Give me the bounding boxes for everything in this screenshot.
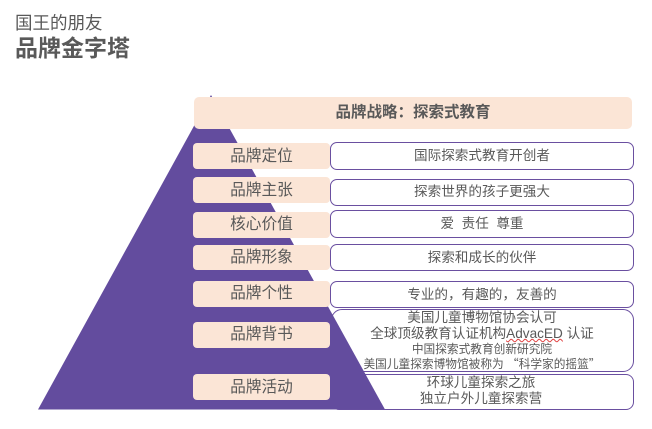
top bar: brand strategy [194,97,632,129]
label: proposition [193,177,330,203]
text: endorsement lines [363,310,600,372]
label: activities [193,374,330,400]
text: endorsement lines: 全球顶级教育认证机构AdvacED 认证 [370,326,594,341]
top bar: brand strategy: 品牌战略：探索式教育 [335,104,490,121]
box: activities [331,374,634,410]
label: endorsement: 品牌背书 [230,326,293,343]
box: personality: 专业的，有趣的，友善的 [407,287,557,302]
label: positioning [193,143,330,169]
box: endorsement [331,309,634,372]
text: endorsement lines: 美国儿童探索博物馆被称为 “科学家的摇篮” [363,355,600,372]
box: personality [330,281,634,308]
text: activities lines: 环球儿童探索之旅 [427,375,535,390]
label: proposition: 品牌主张 [230,182,293,199]
text: activities lines: 独立户外儿童探索营 [420,391,542,406]
label: endorsement [193,322,330,348]
box: proposition: 探索世界的孩子更强大 [414,184,550,199]
box: core values: 爱 责任 尊重 [440,216,524,231]
label: image [193,245,330,270]
text: activities lines [420,375,542,406]
text: endorsement lines: 中国探索式教育创新研究院 [412,343,552,356]
title: main heading: 品牌金字塔 [15,35,130,61]
title: subtitle: 国王的朋友 [15,13,102,33]
text: endorsement lines: 美国儿童博物馆协会认可 [407,310,557,325]
box: positioning [330,142,634,170]
label: core values [193,212,330,238]
label: personality: 品牌个性 [230,285,293,302]
box: image: 探索和成长的伙伴 [428,250,536,265]
label: image: 品牌形象 [230,249,293,266]
label: core values: 核心价值 [230,216,293,233]
box: proposition [330,179,634,206]
label: positioning: 品牌定位 [230,148,293,165]
box: image [330,244,634,271]
box: positioning: 国际探索式教育开创者 [414,148,550,163]
label: personality [193,281,330,307]
label: activities: 品牌活动 [230,379,293,396]
box: core values [330,210,634,238]
